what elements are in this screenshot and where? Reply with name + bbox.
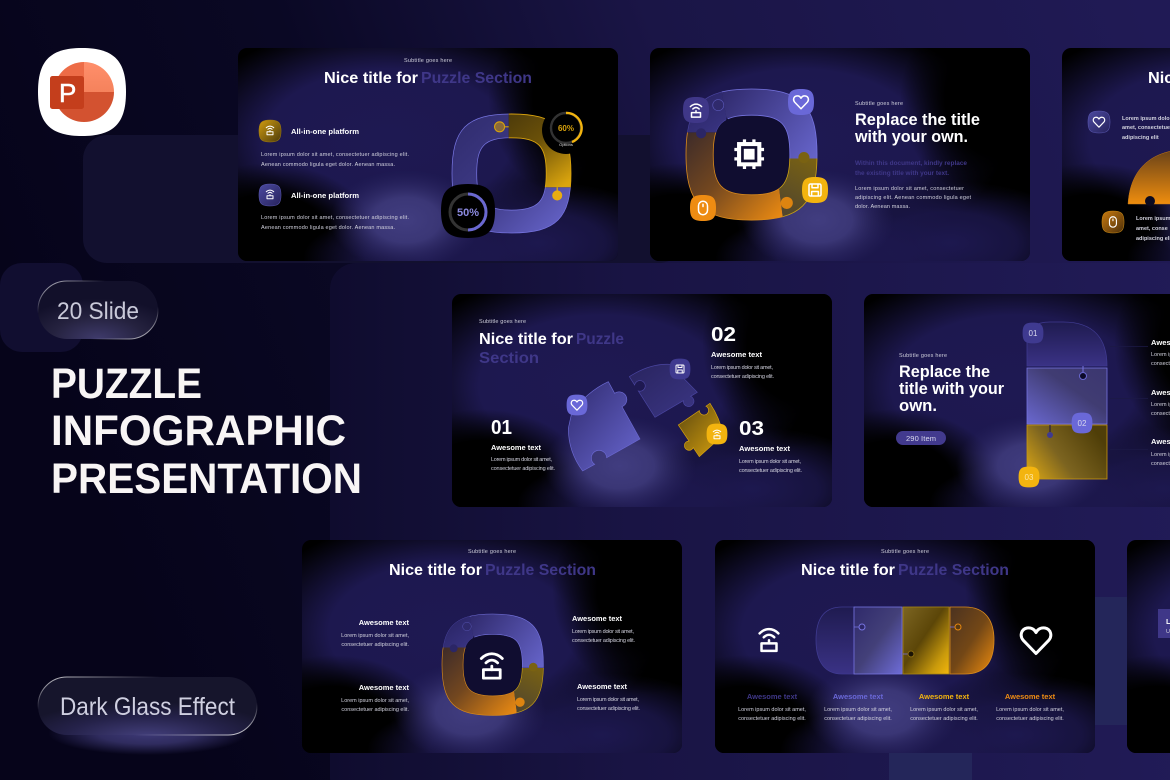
panel: slide 6 ring with router: [227, 485, 752, 780]
horizontal puzzle pill: [816, 607, 994, 674]
text lower left: Lorem ipsum dolor sit amet,: [341, 698, 409, 704]
cropped blue card: [1158, 609, 1170, 638]
main title: PUZZLE: [51, 360, 202, 408]
slide 2 text: [854, 101, 980, 210]
text upper left: Awesome text: [359, 618, 409, 627]
text lower right: consectetuer adipiscing elit.: [577, 706, 640, 712]
callout 03: [739, 418, 802, 474]
icon: router: [707, 424, 727, 444]
icon: heart badge: [1088, 111, 1110, 133]
icon: save: [802, 177, 828, 203]
puzzle ring: [686, 89, 817, 220]
callout 03: Awesome text: [739, 444, 790, 453]
callout 01: consectetuer adipiscing elit.: [491, 466, 555, 472]
item text lower: amet, conse: [1136, 226, 1168, 232]
slide 6 heading: Nice title for: [389, 562, 482, 579]
badge: 20 Slide: [38, 281, 158, 339]
slide 7 heading: Nice title for: [801, 562, 895, 579]
slide 4 heading: [479, 319, 624, 367]
text upper right: [572, 614, 635, 644]
pill: item count: 290 Item: [906, 434, 936, 443]
slide 4 heading: Puzzle: [576, 331, 624, 348]
item text upper: [1122, 116, 1170, 141]
slide 1 heading: [324, 58, 532, 87]
main title: [51, 360, 362, 503]
icon: router: [481, 654, 502, 678]
icon: heart: [788, 89, 814, 115]
item text upper: adipiscing elit: [1122, 135, 1159, 141]
slide 6 heading: Subtitle goes here: [468, 549, 516, 555]
text upper left: [341, 618, 409, 648]
main title: PRESENTATION: [51, 455, 362, 503]
callout 01: Lorem ipsum dolor sit amet,: [491, 457, 552, 463]
item one: gold platform: All-in-one platform: [291, 127, 359, 136]
slide 2 text: Within this document, kindly replace: [855, 160, 968, 167]
slide 1 heading: Subtitle goes here: [404, 58, 452, 64]
label 02: 02: [1078, 419, 1087, 428]
column 3: Awesome text: [919, 692, 970, 701]
slide 7 heading: Puzzle Section: [898, 562, 1009, 579]
slide 5 heading: [899, 353, 1004, 415]
PowerPoint app icon: [38, 48, 126, 136]
icon: save: [670, 359, 690, 379]
column 3: [910, 692, 978, 722]
text lower left: [341, 683, 409, 713]
icon: mouse badge: [1102, 211, 1124, 233]
orange dome: [1128, 151, 1170, 206]
text lower right: Lorem ipsum dolor sit amet,: [577, 697, 639, 703]
label 02: [1072, 413, 1092, 433]
icon: chip: [734, 139, 764, 169]
slide 2 text: adipiscing elit. Aenean commodo ligula eget: [855, 195, 971, 201]
column 1: [738, 692, 806, 722]
gauge: 60% options: [542, 106, 590, 154]
text upper right: consectetuer adipiscing elit.: [572, 638, 635, 644]
column 4: Awesome text: [1005, 692, 1056, 701]
icon: mouse: [690, 195, 716, 221]
panel: slide 7 horizontal pill: [640, 485, 1165, 780]
slide 5 heading: Replace the: [899, 362, 990, 381]
slide 6 heading: Puzzle Section: [485, 562, 596, 579]
item two: blue platform: Lorem ipsum dolor sit amet, consectetuer adipiscing elit.: [261, 215, 409, 221]
icon: heart: [567, 395, 587, 415]
column 1: Lorem ipsum dolor sit amet,: [738, 707, 806, 713]
label 01: 01: [1029, 329, 1038, 338]
column 1: consectetuer adipiscing elit.: [738, 716, 806, 722]
item two: blue platform: Aenean commodo ligula eget dolor. Aenean massa.: [261, 225, 395, 231]
slide 2 text: the existing title with your text.: [855, 170, 949, 177]
item two: blue platform: All-in-one platform: [291, 191, 359, 200]
gauge: 50%: [441, 184, 495, 238]
column 1: Awesome text: [747, 692, 798, 701]
slide 5 heading: own.: [899, 396, 937, 415]
column 2: Lorem ipsum dolor sit amet,: [824, 707, 892, 713]
item one: gold platform: Lorem ipsum dolor sit amet, consectetuer adipiscing elit.: [261, 152, 409, 158]
callout 02: Awesome text: [711, 350, 762, 359]
slide 2 text: Replace the title: [855, 110, 980, 129]
puzzle ring: [442, 614, 543, 715]
callout 03: 03: [739, 418, 764, 440]
label 03: 03: [1025, 473, 1034, 482]
item one: gold platform: [259, 120, 409, 168]
gauge: 50%: 50%: [457, 207, 479, 219]
puzzle ring: [452, 114, 571, 233]
item text lower: [1136, 216, 1170, 242]
text lower right: Awesome text: [577, 682, 627, 691]
column 2: [824, 692, 892, 722]
badge: Dark Glass Effect: Dark Glass Effect: [60, 693, 235, 721]
label 01: [1023, 323, 1043, 343]
panel: slide 2 ring with chip: [575, 0, 1100, 306]
slide 4 heading: Nice title for: [479, 331, 573, 348]
callout 02: [711, 324, 774, 380]
callout 02: consectetuer adipiscing elit.: [711, 374, 774, 380]
item one: gold platform: Aenean commodo ligula eget dolor. Aenean massa.: [261, 162, 395, 168]
column 3: Lorem ipsum dolor sit amet,: [910, 707, 978, 713]
slide 5 heading: Subtitle goes here: [899, 353, 947, 359]
panel: slide 5 stacked blocks: [789, 239, 1170, 552]
slide 4 heading: Subtitle goes here: [479, 319, 526, 325]
text lower right: [577, 682, 640, 712]
column 3: consectetuer adipiscing elit.: [910, 716, 978, 722]
text lower left: Awesome text: [359, 683, 409, 692]
slide 2 text: with your own.: [854, 127, 968, 146]
icon: heart: [1021, 628, 1051, 654]
item two: blue platform: [259, 184, 409, 231]
label 03: [1019, 467, 1039, 487]
panel: slide 1 circular progress: [238, 48, 618, 261]
puzzle pieces: [568, 364, 723, 471]
text upper right: Lorem ipsum dolor sit amet,: [572, 629, 634, 635]
text lower left: consectetuer adipiscing elit.: [341, 707, 409, 713]
item text lower: adipiscing eli: [1136, 236, 1170, 242]
item text lower: Lorem ipsum: [1136, 216, 1170, 222]
column 2: consectetuer adipiscing elit.: [824, 716, 892, 722]
slide 1 heading: Nice title for: [324, 70, 418, 87]
main title: INFOGRAPHIC: [51, 407, 346, 455]
stacked puzzle: [1027, 322, 1107, 479]
callout 01: [491, 417, 555, 472]
column 4: [996, 692, 1064, 722]
column 2: Awesome text: [833, 692, 884, 701]
slide 5 heading: title with your: [899, 379, 1004, 398]
icon: router: [683, 97, 709, 123]
badge: 20 Slide: 20 Slide: [57, 298, 139, 325]
column 4: consectetuer adipiscing elit.: [996, 716, 1064, 722]
slide 1 heading: Puzzle Section: [421, 70, 532, 87]
column 4: Lorem ipsum dolor sit amet,: [996, 707, 1064, 713]
panel: slide 3 cropped: [987, 0, 1170, 306]
slide 6 heading: [389, 549, 596, 579]
gauge: 60% options: Options: [559, 142, 573, 147]
callout 01: 01: [491, 417, 512, 439]
text upper left: Lorem ipsum dolor sit amet,: [341, 633, 409, 639]
slide 2 text: dolor. Aenean massa.: [855, 204, 910, 210]
callout 03: consectetuer adipiscing elit.: [739, 468, 802, 474]
text upper right: Awesome text: [572, 614, 622, 623]
slide 2 text: Subtitle goes here: [855, 101, 903, 107]
badge: Dark Glass Effect: [38, 677, 257, 755]
panel: slide 8 cropped: [1052, 485, 1170, 780]
slide 4 heading: Section: [479, 350, 539, 367]
pill: item count: [896, 431, 946, 445]
panel: slide 4 puzzle pieces: [377, 239, 902, 552]
PowerPoint app icon: P: [59, 78, 76, 108]
icon: router: [760, 629, 778, 651]
text upper left: consectetuer adipiscing elit.: [341, 642, 409, 648]
side labels: [1110, 338, 1170, 467]
callout 03: Lorem ipsum dolor sit amet,: [739, 459, 801, 465]
callout 01: Awesome text: [491, 443, 541, 452]
slide 7 heading: [801, 549, 1009, 579]
callout 02: 02: [711, 324, 736, 346]
slide 7 heading: Subtitle goes here: [881, 549, 929, 555]
slide 2 text: Lorem ipsum dolor sit amet, consectetuer: [855, 186, 964, 192]
callout 02: Lorem ipsum dolor sit amet,: [711, 365, 773, 371]
gauge: 60% options: 60%: [558, 124, 574, 133]
